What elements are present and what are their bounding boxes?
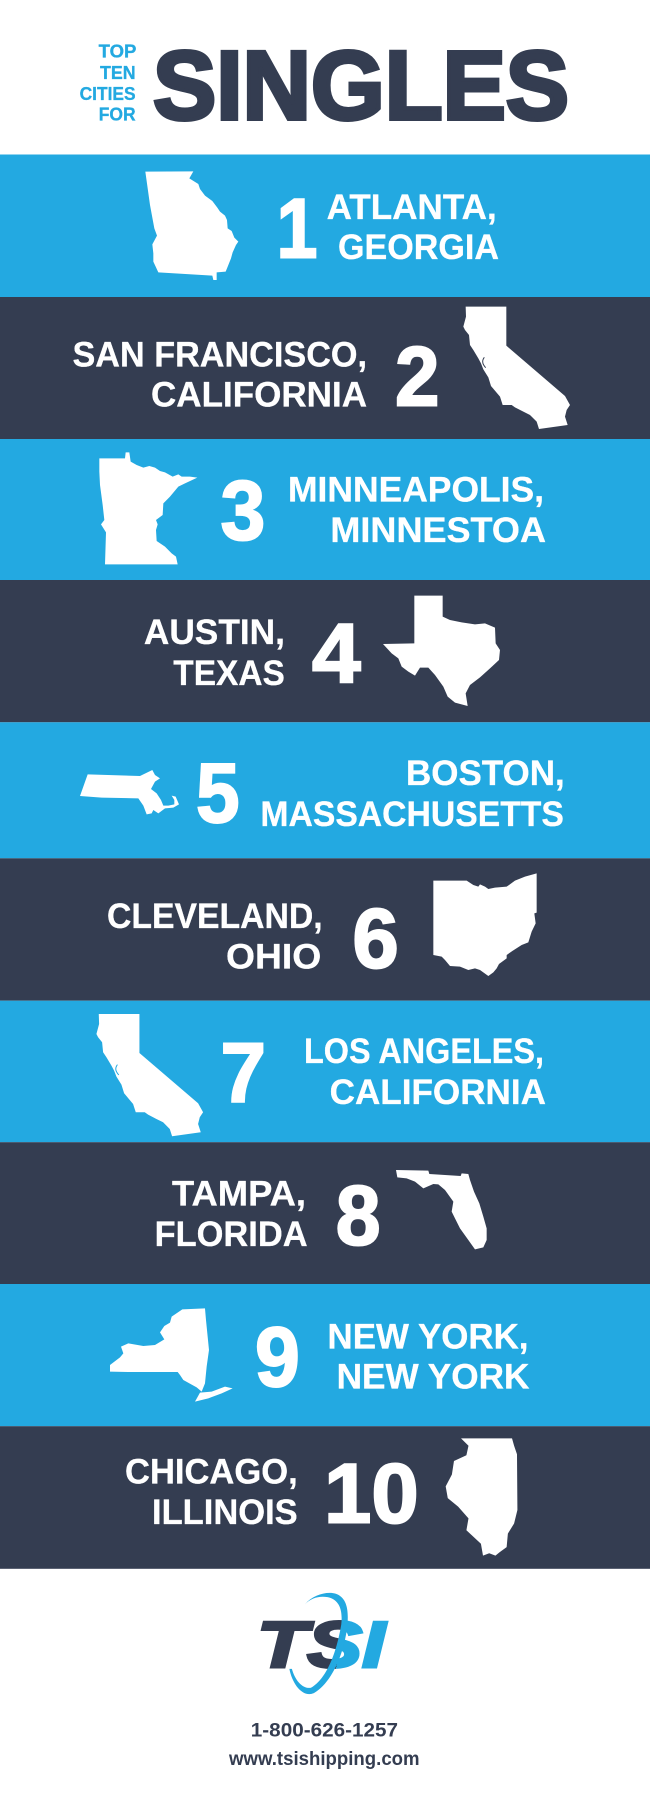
website: www.tsishipping.com	[228, 1748, 420, 1770]
logo: TSI	[257, 1593, 387, 1694]
icon: Georgia map	[145, 171, 238, 280]
logo wordmark: TSI	[257, 1608, 387, 1681]
icon: California map	[96, 1014, 203, 1136]
rank number 10: 10	[324, 1446, 419, 1540]
city label: Cleveland, Ohio: OHIO	[226, 938, 321, 976]
rank number 6: 6	[352, 892, 399, 986]
panel: 3 Minneapolis, Minnesota	[0, 439, 650, 580]
city label: Tampa, Florida: TAMPA,	[172, 1174, 306, 1214]
rank number 3: 3	[220, 464, 265, 558]
city label: San Francisco, California	[72, 336, 367, 414]
city label: Cleveland, Ohio	[107, 897, 323, 976]
panel: 9 New York, New York	[0, 1284, 650, 1426]
icon: Florida map	[396, 1170, 487, 1249]
city label: Boston, Massachusetts: BOSTON,	[406, 754, 565, 793]
icon: California map	[463, 307, 570, 429]
rank number 4: 4	[312, 606, 361, 700]
city label: Atlanta, Georgia	[327, 188, 499, 267]
heading kicker: top ten cities for: TOP	[99, 42, 136, 62]
city label: Los Angeles, California: CALIFORNIA	[330, 1073, 546, 1112]
rank number 9: 9	[255, 1310, 300, 1404]
icon: New York map	[110, 1308, 233, 1402]
panel: 4 Austin, Texas	[0, 580, 650, 722]
panel: 7 Los Angeles, California	[0, 1001, 650, 1142]
panel: 2 San Francisco, California	[0, 297, 650, 439]
icon: Minnesota map	[99, 452, 197, 564]
panel: 6 Cleveland, Ohio	[0, 858, 650, 1001]
panel: 1 Atlanta, Georgia	[0, 154, 650, 297]
city label: Atlanta, Georgia: GEORGIA	[338, 228, 499, 267]
rank number 7: 7	[220, 1026, 266, 1120]
rank number 5: 5	[196, 746, 240, 840]
city label: New York, New York: NEW YORK,	[328, 1317, 528, 1356]
contact details	[228, 1719, 420, 1770]
city label: San Francisco, California: SAN FRANCISCO,	[72, 336, 367, 374]
panel: 5 Boston, Massachusetts	[0, 722, 650, 858]
city label: Atlanta, Georgia: ATLANTA,	[327, 188, 497, 227]
icon: Illinois map	[446, 1438, 517, 1556]
panel: 10 Chicago, Illinois	[0, 1426, 650, 1569]
icon: Texas map	[383, 596, 500, 706]
rank number 1: 1	[276, 182, 318, 276]
city label: Austin, Texas: TEXAS	[173, 654, 285, 693]
city label: Los Angeles, California: LOS ANGELES,	[304, 1032, 544, 1071]
city label: Minneapolis, Minnestoa: MINNESTOA	[330, 511, 546, 550]
city label: Los Angeles, California	[304, 1032, 546, 1112]
heading: top ten cities for singles	[80, 31, 569, 140]
heading kicker: top ten cities for: CITIES	[80, 84, 136, 104]
logo orbit ring	[289, 1593, 348, 1694]
heading kicker: top ten cities for	[80, 42, 136, 124]
panel: 8 Tampa, Florida	[0, 1142, 650, 1284]
city label: Minneapolis, Minnestoa	[288, 470, 546, 550]
city label: Chicago, Illinois	[125, 1453, 298, 1532]
city label: New York, New York	[328, 1317, 529, 1396]
city label: Chicago, Illinois: ILLINOIS	[152, 1493, 298, 1532]
city label: Austin, Texas	[144, 613, 285, 693]
heading word: singles: SINGLES	[153, 31, 569, 140]
heading kicker: top ten cities for: TEN	[100, 63, 136, 83]
rank number 2: 2	[395, 330, 440, 424]
heading kicker: top ten cities for: FOR	[99, 104, 136, 124]
city label: Austin, Texas: AUSTIN,	[144, 613, 285, 652]
city label: Cleveland, Ohio: CLEVELAND,	[107, 897, 323, 936]
city label: Chicago, Illinois: CHICAGO,	[125, 1453, 298, 1492]
city label: Tampa, Florida: FLORIDA	[155, 1215, 308, 1254]
city label: Boston, Massachusetts: MASSACHUSETTS	[260, 795, 564, 834]
city label: Boston, Massachusetts	[260, 754, 565, 834]
city label: Tampa, Florida	[155, 1174, 308, 1254]
icon: Massachusetts map	[80, 770, 179, 814]
phone number: 1-800-626-1257	[251, 1719, 398, 1741]
icon: Ohio map	[433, 873, 537, 976]
city label: New York, New York: NEW YORK	[337, 1357, 529, 1396]
city label: San Francisco, California: CALIFORNIA	[151, 376, 367, 414]
city label: Minneapolis, Minnestoa: MINNEAPOLIS,	[288, 470, 544, 510]
rank number 8: 8	[336, 1168, 381, 1262]
